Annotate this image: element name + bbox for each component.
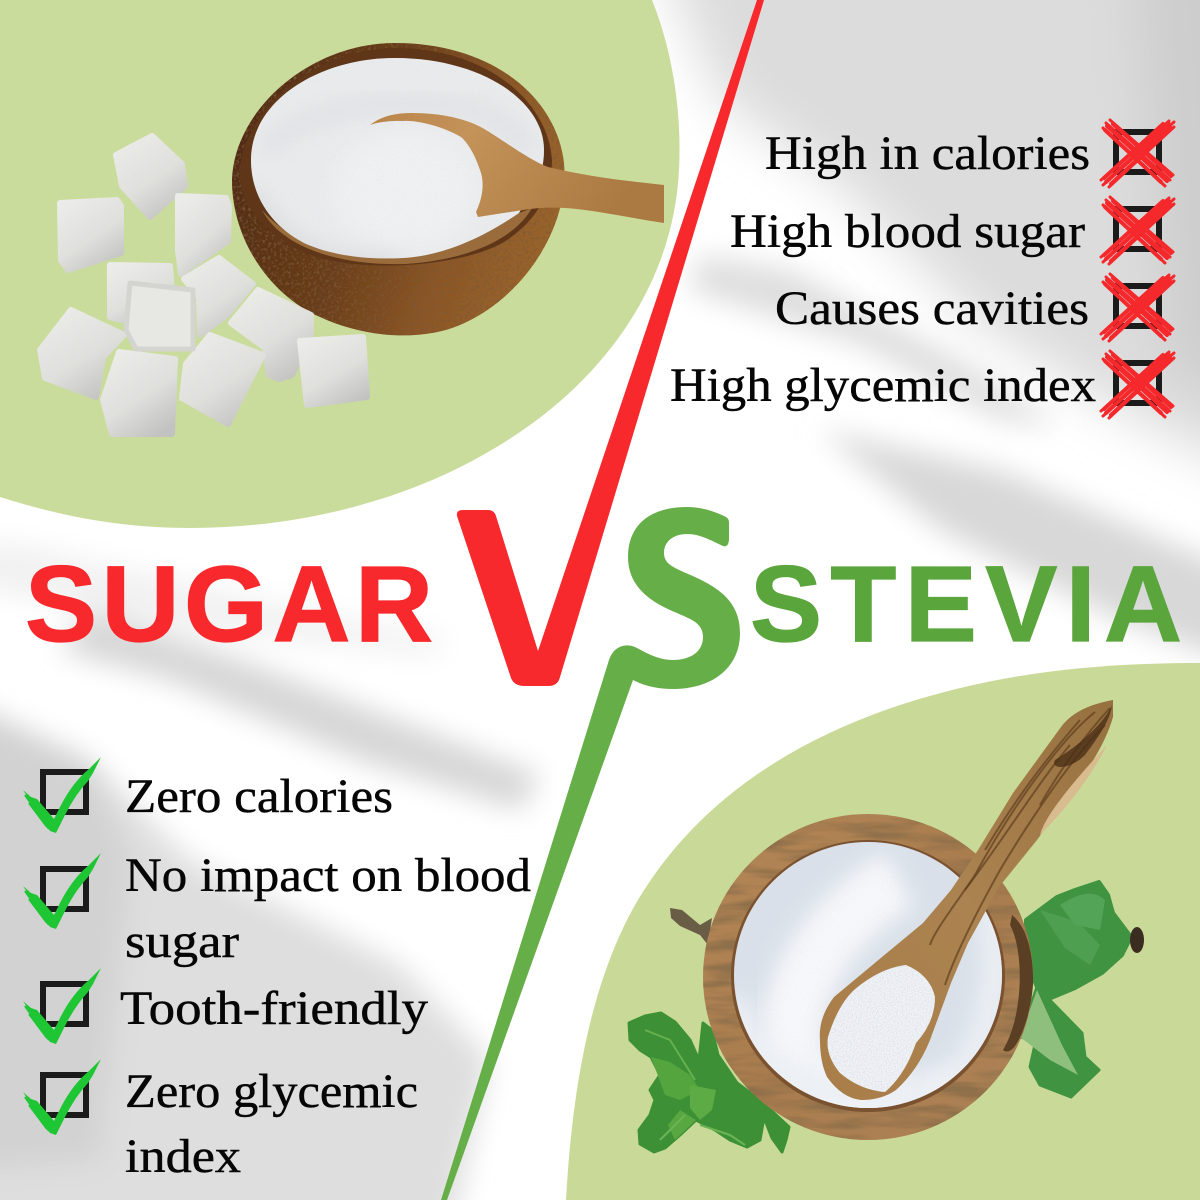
spoon xyxy=(820,700,1113,1100)
cube xyxy=(178,196,229,274)
row: high blood sugar: High blood sugar xyxy=(730,205,1085,258)
bowl rim xyxy=(240,48,552,266)
panel: sugar green blob xyxy=(0,0,680,528)
row: tooth-friendly: Tooth-friendly xyxy=(120,982,428,1035)
row: high blood sugar xyxy=(730,197,1174,264)
bowl xyxy=(703,814,1033,1140)
cube xyxy=(60,200,121,270)
cube xyxy=(103,352,175,434)
cube xyxy=(110,265,172,322)
row: no impact on blood sugar xyxy=(23,849,531,968)
row: high in calories xyxy=(765,120,1174,187)
twig xyxy=(670,908,712,945)
row: high in calories: High in calories xyxy=(765,127,1090,180)
row: zero calories xyxy=(23,757,393,833)
row: high glycemic index xyxy=(670,351,1174,418)
row: no impact on blood sugar: No impact on blood xyxy=(125,849,531,902)
cube xyxy=(231,290,311,379)
heading: SUGAR: SUGAR xyxy=(25,543,433,664)
cube xyxy=(40,310,124,397)
list: sugar drawbacks xyxy=(670,120,1174,418)
arrow: green S diagonal xyxy=(441,507,740,1200)
cube xyxy=(184,258,253,335)
row: tooth-friendly xyxy=(23,968,428,1044)
cube xyxy=(182,335,263,424)
spoon pile xyxy=(828,965,935,1092)
arrow: red V diagonal xyxy=(457,0,764,686)
image: sugar bowl with spoon xyxy=(232,43,664,335)
row: zero glycemic index xyxy=(23,1059,418,1183)
row: causes cavities: Causes cavities xyxy=(775,282,1089,335)
row: causes cavities xyxy=(775,274,1174,341)
heading: STEVIA: STEVIA xyxy=(750,543,1182,664)
row: no impact on blood sugar: sugar xyxy=(125,915,239,968)
row: zero glycemic index: Zero glycemic xyxy=(125,1065,418,1118)
row: zero glycemic index: index xyxy=(125,1130,241,1183)
cube xyxy=(300,337,367,405)
wooden spoon xyxy=(370,113,664,223)
stevia powder xyxy=(730,840,1010,1110)
left leaves xyxy=(629,1013,789,1152)
image: sugar cubes xyxy=(40,136,367,434)
list: stevia benefits xyxy=(23,757,531,1183)
row: high glycemic index: High glycemic index xyxy=(670,359,1096,412)
sugar surface xyxy=(251,58,544,258)
image: stevia bowl with spoon and leaves xyxy=(629,700,1144,1152)
cube xyxy=(116,136,185,217)
row: zero calories: Zero calories xyxy=(125,770,393,823)
cube xyxy=(126,283,193,349)
panel: stevia green blob xyxy=(566,663,1200,1200)
right leaves xyxy=(1020,882,1144,1097)
